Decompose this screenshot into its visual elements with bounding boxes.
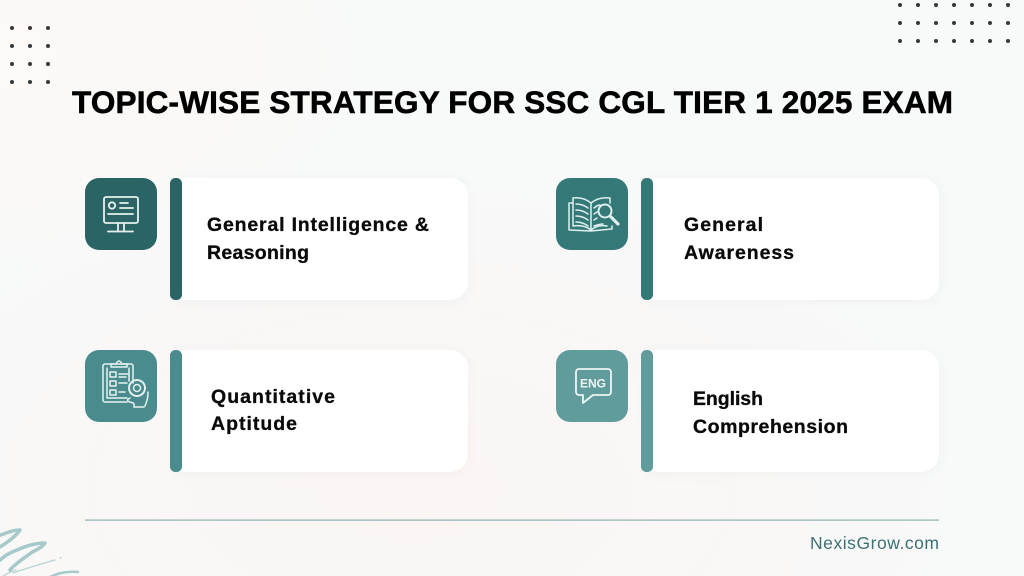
panel: English Comprehension [556, 350, 939, 472]
panel: General Intelligence & Reasoning [85, 178, 468, 300]
title: TOPIC-WISE STRATEGY FOR SSC CGL TIER 1 2025 EXAM [72, 84, 953, 120]
card: General Intelligence & Reasoning: Reasoning [207, 242, 309, 264]
card: English Comprehension [641, 350, 939, 472]
icon: ENG speech bubble: ENG [580, 376, 606, 390]
icon: computer monitor [85, 178, 157, 250]
card: Quantitative Aptitude: Quantitative [211, 386, 335, 408]
panel: Quantitative Aptitude [85, 350, 468, 472]
decorative dots: top right [898, 3, 1010, 43]
card: Quantitative Aptitude: Aptitude [211, 413, 297, 435]
icon: clipboard with gear head [85, 350, 157, 422]
card: General Awareness [641, 178, 939, 300]
card: General Awareness: Awareness [684, 242, 794, 264]
footer rule [85, 520, 939, 521]
decorative brush strokes [0, 530, 78, 576]
card: English Comprehension: Comprehension [693, 416, 848, 438]
decorative dots: top left [10, 26, 50, 84]
card: English Comprehension: English [693, 388, 763, 410]
card: General Intelligence & Reasoning: General Intelligence & [207, 214, 429, 236]
card: Quantitative Aptitude [170, 350, 468, 472]
card: General Intelligence & Reasoning [170, 178, 468, 300]
icon: ENG speech bubble [556, 350, 628, 422]
panel: General Awareness [556, 178, 939, 300]
icon: open book with magnifier [556, 178, 628, 250]
footer brand text: NexisGrow.com [810, 533, 939, 553]
card: General Awareness: General [684, 214, 763, 236]
